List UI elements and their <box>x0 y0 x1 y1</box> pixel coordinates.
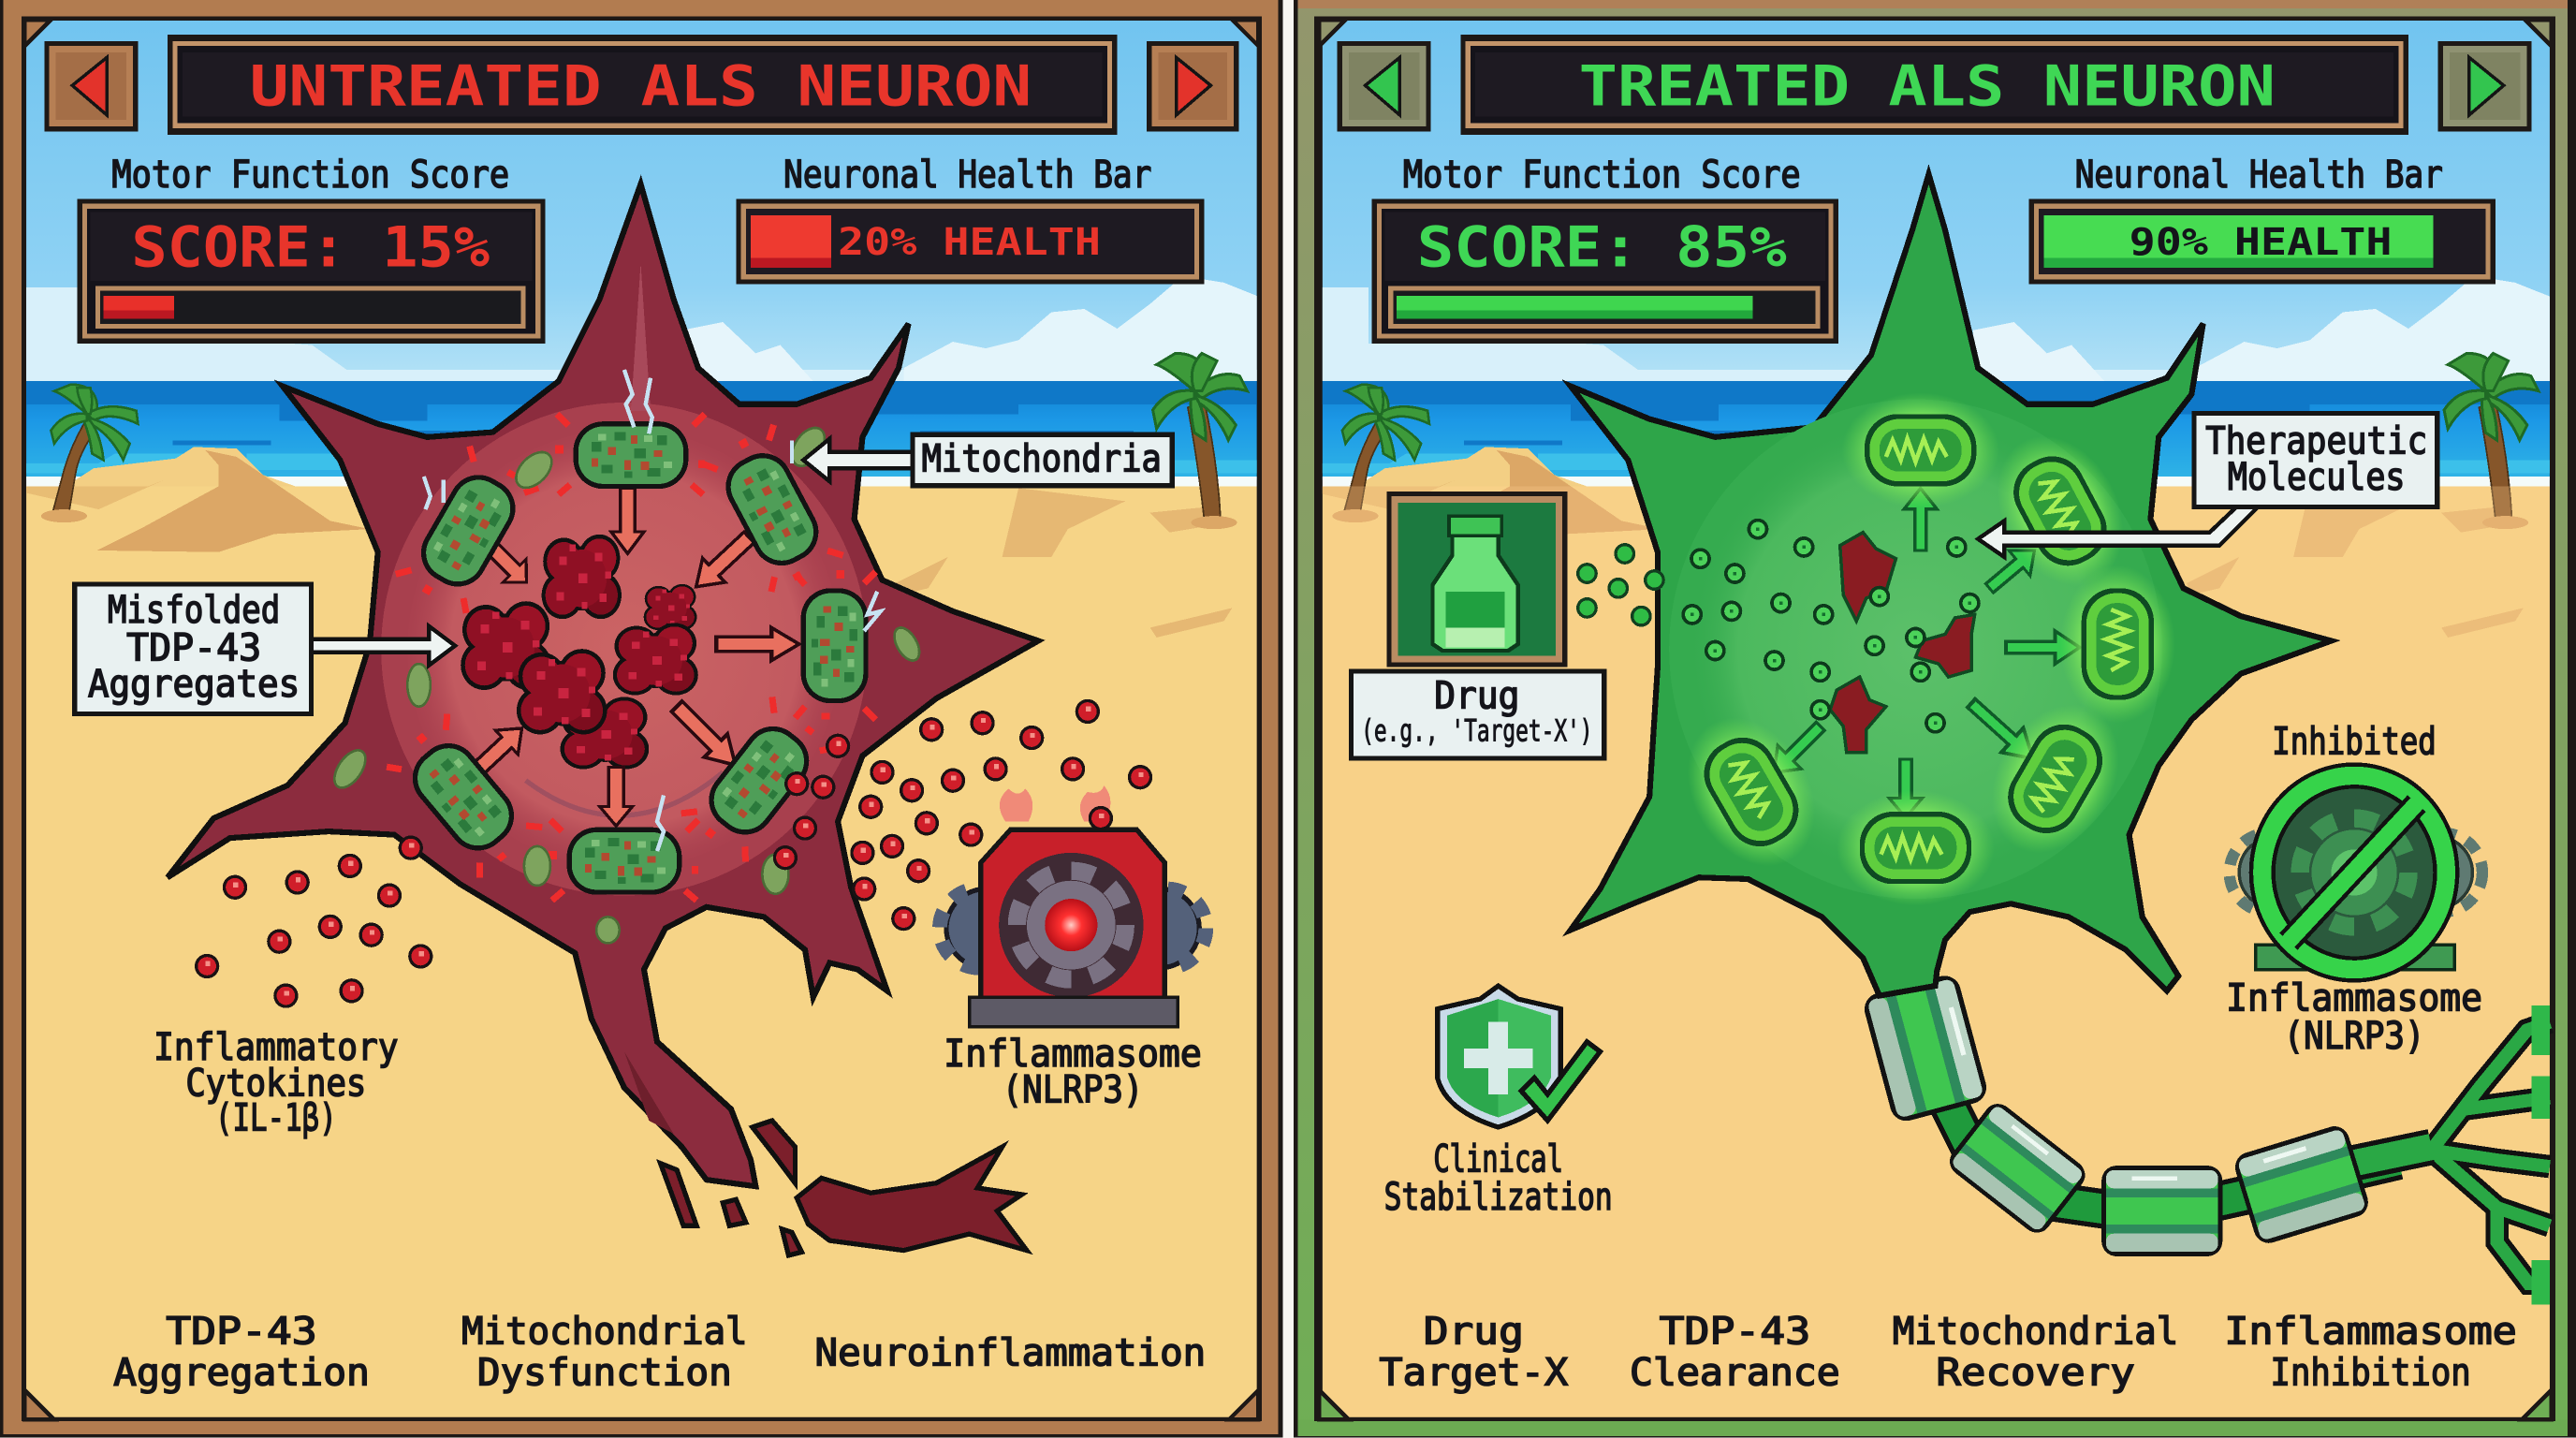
damaged neuron body <box>168 184 1038 1186</box>
bottom label: TDP-43 clearance: Clearance <box>1630 1351 1840 1395</box>
frame corners <box>24 20 1258 1419</box>
label: inflammasome NLRP3: Inflammasome <box>944 1032 1202 1076</box>
bottom label: mitochondrial dysfunction: Dysfunction <box>477 1351 732 1395</box>
label: motor function score: Motor Function Score <box>1403 153 1801 197</box>
health bar: 20% HEALTH <box>838 220 1101 264</box>
callout: therapeutic molecules: Therapeutic <box>2205 418 2427 462</box>
bottom label: mitochondrial dysfunction <box>461 1310 748 1395</box>
glowing mitochondria <box>1662 392 2175 905</box>
bottom label: drug target-x: Target-X <box>1379 1351 1568 1395</box>
bottom label: TDP-43 aggregation <box>113 1310 370 1395</box>
bottom label: mitochondrial recovery: Mitochondrial <box>1893 1310 2178 1354</box>
therapeutic molecules <box>1681 519 1981 734</box>
icon: inflammasome machine <box>940 785 1206 1027</box>
health bar <box>736 198 1204 285</box>
callout: mitochondria <box>803 433 1175 488</box>
bottom label: inflammasome inhibition: Inflammasome <box>2224 1310 2517 1354</box>
label: inflammatory cytokines: Inflammatory <box>154 1025 399 1069</box>
frame corners <box>1319 20 2552 1419</box>
bottom label: neuroinflammation: Neuroinflammation <box>815 1330 1206 1374</box>
title bar <box>1460 35 2408 135</box>
icon: clinical stabilization shield <box>1438 986 1600 1127</box>
right arrow button <box>2438 41 2532 131</box>
broken axon fragments <box>661 1121 1027 1255</box>
bottom label: drug target-x: Drug <box>1424 1310 1524 1354</box>
label: clinical stabilization: Clinical <box>1433 1137 1563 1181</box>
axon with myelin <box>1861 972 2550 1305</box>
label: motor function score: Motor Function Score <box>111 153 509 197</box>
beach background <box>1322 21 2550 1417</box>
misfolded aggregates <box>461 535 698 770</box>
bottom label: mitochondrial recovery: Recovery <box>1936 1351 2135 1395</box>
icon: drug bottle <box>1386 492 1567 668</box>
panel: untreated ALS neuron <box>0 0 1283 1438</box>
label: neuronal health bar: Neuronal Health Bar <box>783 153 1151 197</box>
label: inflammasome NLRP3: (NLRP3) <box>2284 1014 2425 1058</box>
callout: drug: Drug <box>1434 673 1519 717</box>
title bar: TREATED ALS NEURON <box>1579 54 2276 119</box>
callout: misfolded TDP-43 aggregates <box>72 581 455 716</box>
right arrow button <box>1147 41 1238 131</box>
callout: drug <box>1349 668 1606 761</box>
red aggregate remnants <box>1830 533 1975 753</box>
callout: misfolded TDP-43 aggregates: Misfolded <box>108 588 280 632</box>
label: inflammatory cytokines: (IL-1β) <box>215 1096 337 1140</box>
cytokines cluster left <box>195 835 432 1008</box>
callout: therapeutic molecules <box>1978 411 2439 557</box>
health bar: 90% HEALTH <box>2130 220 2392 264</box>
molecules entering the cell <box>1576 543 1665 627</box>
bottom label: TDP-43 aggregation: Aggregation <box>113 1351 370 1395</box>
small organelles <box>329 422 925 943</box>
label: inflammatory cytokines: Cytokines <box>185 1062 366 1106</box>
bottom label: TDP-43 clearance: TDP-43 <box>1660 1310 1810 1354</box>
lightning sparks <box>424 370 881 851</box>
label: neuronal health bar: Neuronal Health Bar <box>2075 153 2443 197</box>
score panel <box>77 198 546 344</box>
left arrow button <box>1338 41 1431 131</box>
label: inflammasome NLRP3 <box>944 1032 1202 1112</box>
bottom label: TDP-43 clearance <box>1630 1310 1840 1395</box>
label: inflammatory cytokines <box>154 1025 399 1140</box>
bottom label: mitochondrial dysfunction: Mitochondrial <box>461 1310 748 1354</box>
beach background <box>26 21 1257 1417</box>
callout: drug: (e.g., 'Target-X') <box>1361 715 1593 749</box>
label: inflammasome NLRP3: Inflammasome <box>2226 976 2482 1020</box>
label: clinical stabilization <box>1384 1137 1613 1219</box>
stress arrows <box>465 488 799 826</box>
panel: treated ALS neuron <box>1292 0 2576 1438</box>
score panel <box>1372 198 1838 344</box>
health bar <box>2029 198 2496 285</box>
recovery arrows <box>1763 489 2080 818</box>
panel frame <box>1294 0 2576 1438</box>
callout: misfolded TDP-43 aggregates: TDP-43 <box>126 626 261 670</box>
bottom label: inflammasome inhibition <box>2224 1310 2517 1395</box>
healthy neuron body <box>1571 174 2331 996</box>
bottom label: inflammasome inhibition: Inhibition <box>2271 1351 2471 1395</box>
score panel: SCORE: 15% <box>131 215 490 280</box>
left arrow button <box>44 41 138 131</box>
label: clinical stabilization: Stabilization <box>1384 1175 1613 1219</box>
mitochondria <box>385 414 875 901</box>
bottom label: TDP-43 aggregation: TDP-43 <box>166 1310 317 1354</box>
callout: mitochondria: Mitochondria <box>922 437 1162 481</box>
bottom label: drug target-x <box>1379 1310 1568 1395</box>
title bar: UNTREATED ALS NEURON <box>250 54 1032 119</box>
callout: therapeutic molecules: Molecules <box>2228 455 2405 499</box>
score panel: SCORE: 85% <box>1417 215 1787 280</box>
axon terminal <box>2349 1022 2550 1284</box>
panel frame <box>0 0 1283 1438</box>
callout: misfolded TDP-43 aggregates: Aggregates <box>88 662 300 706</box>
icon: inhibited inflammasome <box>2230 769 2482 976</box>
bottom label: mitochondrial recovery <box>1893 1310 2178 1395</box>
cytokines cluster right <box>773 699 1152 931</box>
label: inflammasome NLRP3: (NLRP3) <box>1003 1068 1144 1112</box>
label: inhibited: Inhibited <box>2272 720 2437 764</box>
title bar <box>168 35 1117 135</box>
label: inflammasome NLRP3 <box>2226 976 2482 1058</box>
